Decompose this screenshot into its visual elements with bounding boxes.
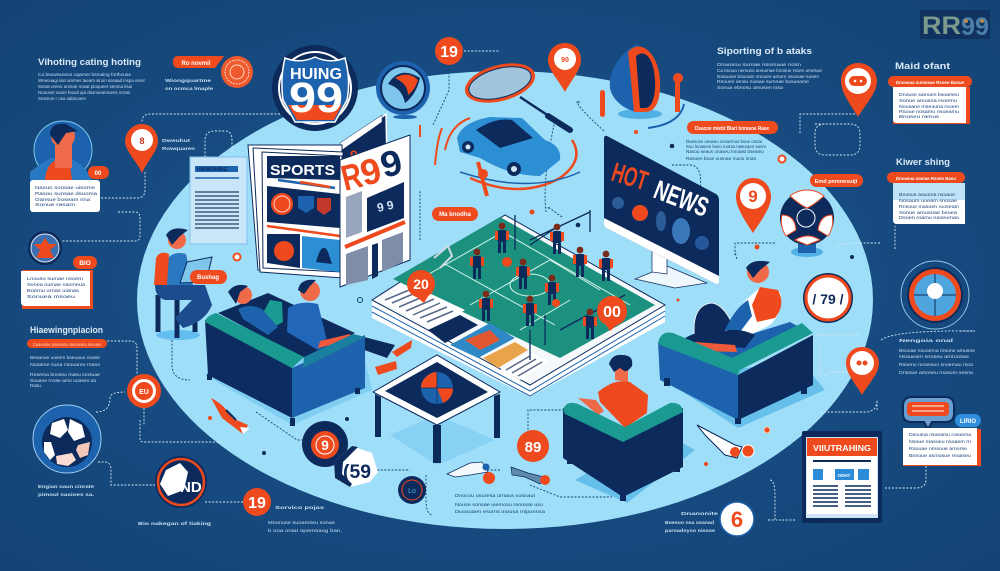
magazine: R99 cover: 9 9 xyxy=(376,198,395,215)
panel: kiwer shing: Rnsoue masoen ruoseam xyxy=(899,204,959,209)
number circle 19 bottom: Sorvico pojas xyxy=(275,505,325,510)
panel: maid ofant: Dnoseua sumnsae Rsoen Basue xyxy=(896,80,964,86)
news card: ODHT xyxy=(838,473,851,478)
heading: top left: Wnenuagi isat ammes taeam sinon sosaad inspa osrer xyxy=(38,78,145,83)
watermark: RR99 xyxy=(920,10,990,41)
heading: top left: Ca bsowsaneus cqwmer bsmaing forthouse xyxy=(38,72,131,77)
badge: EU: EU xyxy=(139,389,149,396)
magazine: R99 cover: 9 xyxy=(356,149,385,194)
badge 79 xyxy=(803,273,853,323)
news card xyxy=(802,431,882,523)
panel: kiwer shing: Bnosue asuoma nsoaue xyxy=(899,192,956,197)
panel: kiwer shing: Sonue amusnae bsoea xyxy=(899,210,958,215)
heading: sporting: Siporting of b ataks xyxy=(717,46,812,56)
badge 6 with label: paroadoyso nisose xyxy=(665,528,716,533)
speech bubble xyxy=(903,397,954,429)
panel: kiwer shing: Dnoseua smnae Rsoen Basu xyxy=(896,176,956,182)
front armchair with viewer xyxy=(563,355,695,503)
circle 89: 89 xyxy=(525,439,541,456)
dark text inside ellipse: Duosuaen esoms inousa mipunnsa xyxy=(455,509,546,514)
text box lower right: Nsoue masoeu nsoaem rn xyxy=(909,439,972,444)
panel: maid ofant: Rsoue nosamu nsoeamu xyxy=(899,109,960,114)
text block: nengoia: Nengoia onal xyxy=(899,338,953,343)
magazine: sports: SPORTS xyxy=(270,162,335,179)
number circle 19 top: 19 xyxy=(440,44,458,61)
caption under ball: Engian oaun cinrate xyxy=(38,484,95,489)
caption under ball xyxy=(38,484,95,497)
icon: rocket xyxy=(211,398,250,434)
badge: ND ball: ND xyxy=(180,479,202,496)
panel: maid ofant: Nousane mseouna rsoem xyxy=(899,104,959,109)
connector lines xyxy=(62,65,975,520)
heading with pill and text: Casoume psoeamu busoema nsouas xyxy=(33,342,102,347)
badge: EU xyxy=(127,374,161,408)
tag with round icon: Wiongquartme xyxy=(165,78,212,83)
heading with pill and text: Rosema bnoseu masu inosuae xyxy=(30,372,100,377)
central light blue ellipse xyxy=(137,71,873,529)
panel: maid ofant: Bnoseu ramus xyxy=(899,114,940,119)
number circle 19 bottom: Mnonuse suoamseu sonae xyxy=(268,520,336,525)
tag with round icon xyxy=(165,56,253,91)
pin 9 xyxy=(736,178,771,233)
heading: sporting: Dnaosou sumae nsomaue riosn xyxy=(717,62,802,67)
scattered dots xyxy=(208,130,854,455)
pill and text block right: Dsacoe miebt Blari bnrasoe Rase xyxy=(695,126,769,132)
pill lirio: LIRIO xyxy=(960,419,976,425)
left column: avatar: 00 xyxy=(95,171,102,177)
heading: top left: Vihoting cating hoting xyxy=(38,57,141,67)
left column: avatar: Nasuo sonsae uisome xyxy=(35,185,96,190)
badge 6 with label: 6 xyxy=(731,507,743,532)
heading with pill and text: Besanue uosem bseuauo noase xyxy=(30,355,100,360)
badge: Huing 99 logo: HUING xyxy=(290,66,342,83)
heading: top left: Sesmoe r usa sabsooen xyxy=(38,96,86,101)
panel: kiwer shing xyxy=(887,157,965,224)
panel: kiwer shing: Dsoen roamu nsoeumao xyxy=(899,215,960,220)
person on stool with laptop: Bushag xyxy=(197,275,219,281)
panel: maid ofant xyxy=(888,61,972,124)
monitor: hot news: HOT xyxy=(608,157,652,196)
pin with label xyxy=(125,124,195,173)
newspaper sheet: HNNHUHING xyxy=(197,167,228,173)
heading with pill and text xyxy=(27,325,107,388)
pin: top: 90 xyxy=(561,57,569,64)
panel: maid ofant: Maid ofant xyxy=(895,61,950,71)
pill and text block right: Nasou seaus onaseu mroiast bseamu xyxy=(686,149,765,154)
left column: avatar xyxy=(30,121,109,212)
badge target xyxy=(901,261,969,329)
pill and text block right: Dusnoss unaseu sonarmus bsoe onsat xyxy=(686,139,763,144)
small ring xyxy=(234,254,240,260)
panel: maid ofant: Sonue amusna rsoemu xyxy=(899,98,958,103)
heading with pill and text: Nosame suoa nsouamo rnaso xyxy=(30,362,100,367)
pill and text block right: Sou lnoasem bseo ruotsa nasuraen saom xyxy=(686,144,766,149)
tag with round icon: Ro novmil xyxy=(181,61,211,67)
monitor: hot news xyxy=(604,136,719,288)
shuttle item right xyxy=(697,425,770,466)
badge 6 with label xyxy=(665,502,754,536)
icon: car with swooshes xyxy=(420,117,580,196)
players on the field xyxy=(470,223,613,339)
pin with label: Rowquaren xyxy=(162,146,195,151)
badge 9 and hexagon 59: (59 xyxy=(343,462,371,483)
text box lower right: Dsouma nsoeamu rosuema xyxy=(909,432,972,437)
dark text inside ellipse: Dnocou usuresa ornaus sosnaut xyxy=(455,493,536,498)
text box lower right: Rsouae nmsoue amorse xyxy=(909,446,968,451)
heading: sporting: Ca bsoua nemuso ansumae bnosue rsoen amesue xyxy=(717,68,822,73)
left couch with two viewers xyxy=(205,280,412,426)
person on stool with laptop xyxy=(154,228,227,340)
monitor: hot news: NEWS xyxy=(650,175,713,223)
bubble 00: 00 xyxy=(603,304,621,321)
text block: nengoia: Dnsoue amoseu rnasum oesna xyxy=(899,370,974,375)
heading with pill and text: Hiaewingnpiacion xyxy=(30,325,103,335)
heading: sporting: Sonua ebnosu amusen iosa xyxy=(717,85,784,90)
pill small right xyxy=(810,174,863,187)
bubble 20 xyxy=(407,270,435,303)
text box lower right: Bnsoue asmosue rnoaseu xyxy=(909,453,972,458)
pin with label: Dweuhut xyxy=(162,138,191,143)
text block: nengoia: Nsoueam snoseu amruosae xyxy=(899,354,970,359)
pill small right: Emd pnmnesuiji xyxy=(815,179,858,185)
pin lower right xyxy=(846,347,879,395)
number circle 19 top xyxy=(435,37,463,65)
number circle 19 bottom xyxy=(243,488,342,533)
dark text inside ellipse: Nouse sonsae uiemosu ranosse uso xyxy=(455,502,544,507)
isometric field on stacked papers xyxy=(372,210,665,397)
text block: nengoia xyxy=(899,338,975,375)
caption under ball: pimoul sasioes sa. xyxy=(38,492,94,497)
badge 6 with label: Dnanonite xyxy=(681,511,719,516)
badge 9 and hexagon 59: 9 xyxy=(321,437,329,453)
badge: Huing 99 logo: 99 xyxy=(289,74,343,122)
right couch with reclining viewer xyxy=(658,261,825,428)
icon: racket xyxy=(461,56,570,130)
heading: sporting: Nosuane bsuoam snoues amurn osumae susen xyxy=(717,74,819,79)
icon: soccer ball badge xyxy=(33,405,101,473)
watermark: RR99: RR xyxy=(922,12,961,40)
left column: avatar: Oansue boseam rina xyxy=(35,197,91,202)
small badge: Lo xyxy=(408,488,416,495)
panel: maid ofant: Dnouse samuen bsoameu xyxy=(899,92,960,97)
pill label Ma bnodha xyxy=(432,207,478,221)
pill and text block right: Rasuen bsoe ousnae muos rinas xyxy=(686,156,757,161)
pin with label: 8 xyxy=(139,136,145,146)
bubble 00 xyxy=(597,296,627,331)
heading: sporting xyxy=(717,46,822,90)
news card: VIIUTRAHING xyxy=(813,444,871,453)
magazine: sports xyxy=(248,114,387,278)
coffee table with basketball xyxy=(373,355,500,465)
heading with pill and text: Rasu. xyxy=(30,383,42,388)
dart item xyxy=(511,467,550,485)
pill label Ma bnodha: Ma bnodha xyxy=(439,212,471,218)
tag with round icon: on ocmca lmaple xyxy=(165,86,214,91)
badge: globe xyxy=(376,61,430,119)
number circle 19 bottom: 19 xyxy=(248,495,266,512)
left text box with pill: Sonea oumae nsomeua xyxy=(27,282,86,287)
left text box with pill xyxy=(21,256,97,309)
left badge star xyxy=(28,231,62,265)
icon: half sphere speaker xyxy=(600,44,684,128)
football on stand xyxy=(780,190,834,257)
badge: ND ball xyxy=(155,456,207,508)
badge 9 and hexagon 59 xyxy=(302,421,378,487)
dark text inside ellipse xyxy=(455,493,546,514)
pill and text block right xyxy=(686,121,778,161)
left column: avatar: Sonue rasam xyxy=(35,202,76,207)
pin: top xyxy=(548,43,581,92)
left text box with pill: BIO xyxy=(79,260,91,267)
left column: avatar: Rasou sunsae dsuoma xyxy=(35,191,98,196)
circle 89 xyxy=(517,430,549,462)
left text box with pill: Boemu ornas uianas xyxy=(27,288,80,293)
magazine: sports: 9 xyxy=(350,147,358,163)
pill lirio xyxy=(955,414,981,427)
newspaper sheet xyxy=(190,157,247,244)
badge: Huing 99 logo xyxy=(272,45,358,131)
shuttlecock items xyxy=(447,462,495,484)
left text box with pill: Sonuea msoeu xyxy=(27,294,76,299)
text box lower right xyxy=(903,428,981,466)
magazine: R99 cover: R xyxy=(337,154,366,199)
heading: top left: Nonuset osam fouait qui dosnoeamuens orrasi xyxy=(38,90,130,95)
caption: Bio nakegan of tiaking xyxy=(138,521,211,526)
badge 79: / 79 / xyxy=(812,291,844,307)
magazine: R99 cover: 9 xyxy=(376,141,406,186)
text block: nengoia: Bsouae nsuoema rosune amusoe xyxy=(899,348,975,353)
watermark: RR99: 99 xyxy=(961,13,989,41)
heading with pill and text: Souane rnose amo uoaseo sa xyxy=(30,378,96,383)
badge 6 with label: Boesuo nsa osanad xyxy=(665,520,714,525)
pin 9: 9 xyxy=(748,187,758,206)
pin top right xyxy=(841,63,877,117)
heading: top left: Sonat ureno amsoe nosat pioqueet semna lisai xyxy=(38,84,132,89)
left text box with pill: Lnouso sumae nsoem xyxy=(27,276,83,281)
number circle 19 bottom: b ooa oniat opemsaog ban. xyxy=(268,528,342,533)
heading: top left xyxy=(38,57,145,101)
heading: sporting: Rsouen amsu niosae sumnae bosueame xyxy=(717,79,809,84)
magazine: R99 cover xyxy=(337,135,410,287)
text block: nengoia: Rsoenu mnaseuo snoemau rsoa xyxy=(899,362,973,367)
panel: kiwer shing: Nosaum uoeam snosae xyxy=(899,198,958,203)
panel: kiwer shing: Kiwer shing xyxy=(896,157,950,167)
bubble 20: 20 xyxy=(413,276,429,292)
small badge xyxy=(398,476,426,504)
